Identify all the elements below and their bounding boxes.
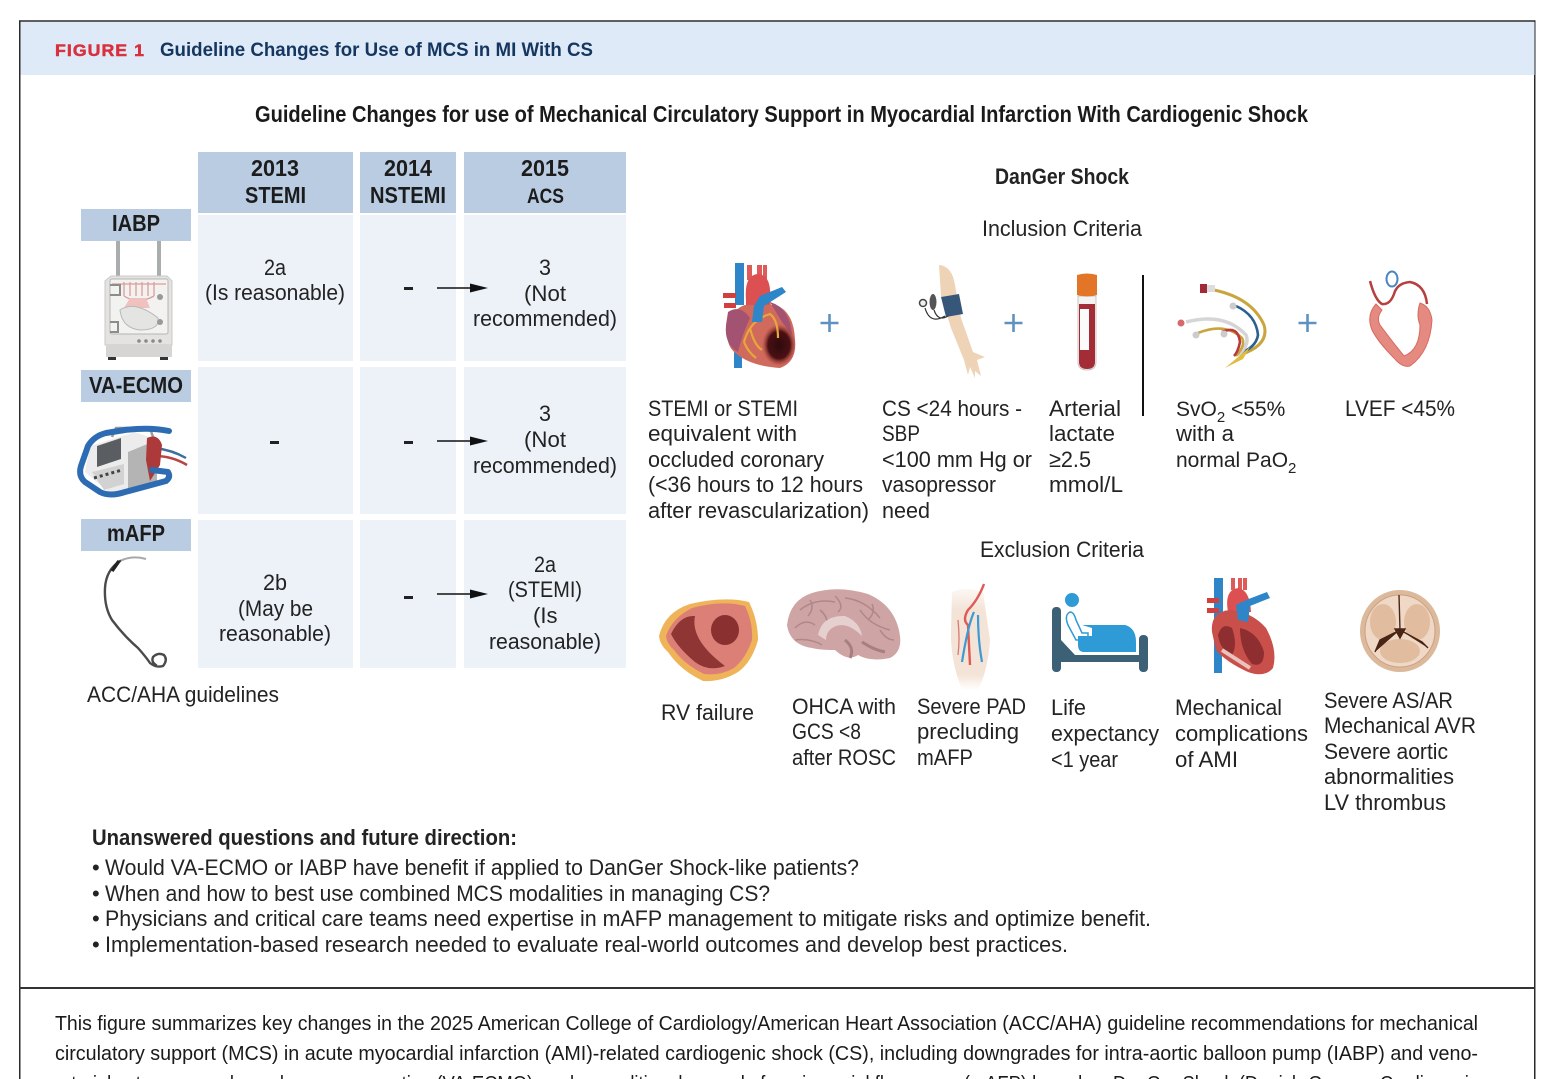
icon: blood tube bbox=[1077, 274, 1097, 370]
text: PAD criterion bbox=[917, 694, 1026, 770]
text: SvO2 criterion: SvO bbox=[1176, 398, 1217, 421]
text: cardiogenic shock criterion: need bbox=[882, 498, 930, 523]
row: IABP cells: 3 bbox=[539, 255, 551, 280]
text: SvO2 criterion: normal PaO bbox=[1176, 449, 1288, 472]
icon: VA-ECMO console bbox=[80, 428, 187, 495]
row: VA-ECMO cells: 3 bbox=[539, 401, 551, 426]
label: IABP bbox=[81, 209, 191, 241]
row: mAFP cells: 2b bbox=[263, 570, 287, 595]
text: aortic criteria: LV thrombus bbox=[1324, 790, 1446, 815]
text: mechanical complications criterion: complications bbox=[1175, 721, 1308, 746]
text: lactate criterion: Arterial bbox=[1049, 396, 1121, 421]
text: lactate criterion: mmol/L bbox=[1049, 472, 1123, 497]
text: STEMI criterion: (<36 hours to 12 hours bbox=[648, 472, 863, 497]
divider: oxygen criteria bbox=[1142, 275, 1144, 416]
text: aortic criteria: Mechanical AVR bbox=[1324, 713, 1476, 738]
header: 2015 ACS: 2015 bbox=[521, 155, 569, 181]
label: mAFP bbox=[81, 519, 191, 551]
figure header band: Guideline Changes for Use of MCS in MI With CS bbox=[160, 40, 593, 61]
header: 2015 ACS: ACS bbox=[527, 185, 564, 208]
panel: unanswered questions: Physicians and critical care teams need expertise in mAFP management to mitigate risks and optimize benefit. bbox=[105, 906, 1151, 931]
text: PAD criterion: Severe PAD bbox=[917, 694, 1026, 719]
panel: unanswered questions: Would VA-ECMO or IABP have benefit if applied to DanGer Shock-like patients? bbox=[105, 855, 859, 880]
text: aortic criteria bbox=[1324, 688, 1476, 815]
header: 2014 NSTEMI: 2014 bbox=[384, 155, 432, 181]
row: mAFP cells: (STEMI) bbox=[508, 577, 582, 602]
row: mAFP cells: reasonable) bbox=[489, 629, 601, 654]
panel: unanswered questions: • bbox=[92, 855, 100, 880]
text: cardiogenic shock criterion: SBP bbox=[882, 421, 920, 446]
text: RV failure: RV failure bbox=[661, 700, 754, 725]
panel: unanswered questions bbox=[92, 825, 1151, 957]
icon: infarcted heart bbox=[723, 263, 796, 368]
text: lactate criterion: lactate bbox=[1049, 421, 1115, 446]
text: cardiogenic shock criterion: <100 mm Hg or bbox=[882, 447, 1032, 472]
text: LVEF criterion: LVEF <45% bbox=[1345, 396, 1455, 421]
figure header band bbox=[20, 22, 1534, 75]
caption: ACC/AHA guidelines: ACC/AHA guidelines bbox=[87, 682, 279, 707]
row: IABP cells bbox=[198, 215, 626, 361]
text: figure caption: This figure summarizes key changes in the 2025 American College of Cardiology/American Heart Association (ACC/AHA) guideline recommendations for mechanical bbox=[55, 1013, 1478, 1035]
heading: inclusion criteria: Inclusion Criteria bbox=[982, 216, 1143, 241]
icon: left ventricle outline bbox=[1370, 272, 1432, 366]
header: 2013 STEMI bbox=[198, 152, 353, 213]
text: SvO2 criterion: 2 bbox=[1217, 409, 1225, 426]
text: aortic criteria: Severe aortic bbox=[1324, 739, 1448, 764]
text: cardiogenic shock criterion: CS <24 hours - bbox=[882, 396, 1022, 421]
icon: mechanical complications heart bbox=[1207, 578, 1274, 674]
row: mAFP cells: (Is bbox=[533, 603, 557, 628]
text: figure caption: circulatory support (MCS) in acute myocardial infarction (AMI)-related cardiogenic shock (CS), including downgrades for intra-aortic balloon pump (IABP) and veno- bbox=[55, 1043, 1478, 1065]
row: VA-ECMO cells: recommended) bbox=[473, 453, 617, 478]
label: VA-ECMO: VA-ECMO bbox=[89, 372, 183, 398]
icon: RV failure heart slice bbox=[659, 599, 758, 681]
icon: leg vessels bbox=[951, 584, 990, 690]
row: VA-ECMO cells bbox=[198, 367, 626, 514]
text: life expectancy criterion: <1 year bbox=[1051, 747, 1118, 772]
text: aortic criteria: Severe AS/AR bbox=[1324, 688, 1453, 713]
icon: aortic valve bbox=[1360, 590, 1440, 672]
icon: brain bbox=[787, 589, 900, 659]
row: IABP cells: (Is reasonable) bbox=[205, 280, 345, 305]
header: 2013 STEMI: 2013 bbox=[251, 155, 299, 181]
text: STEMI criterion: STEMI or STEMI bbox=[648, 396, 798, 421]
icon: microaxial flow pump catheter bbox=[105, 557, 166, 667]
main heading: Guideline Changes for use of Mechanical Circulatory Support in Myocardial Infarction With Cardiogenic Shock bbox=[255, 101, 1308, 127]
label: IABP: IABP bbox=[112, 210, 160, 236]
header: 2013 STEMI: STEMI bbox=[245, 182, 306, 208]
header: 2014 NSTEMI: NSTEMI bbox=[370, 182, 446, 208]
panel: unanswered questions: Implementation-based research needed to evaluate real-world outcomes and develop best practices. bbox=[105, 932, 1068, 957]
plus bbox=[1004, 314, 1022, 332]
text: mechanical complications criterion bbox=[1175, 695, 1308, 772]
figure header band: FIGURE 1 bbox=[55, 41, 145, 60]
text: STEMI criterion: occluded coronary bbox=[648, 447, 824, 472]
row: IABP cells: (Not bbox=[524, 281, 566, 306]
panel: unanswered questions: • bbox=[92, 932, 100, 957]
plus bbox=[1298, 314, 1316, 332]
panel: unanswered questions: • bbox=[92, 881, 100, 906]
plus bbox=[820, 314, 838, 332]
panel: unanswered questions: Unanswered questions and future direction: bbox=[92, 825, 517, 850]
text: SvO2 criterion: with a bbox=[1175, 421, 1235, 446]
header: 2014 NSTEMI bbox=[360, 152, 456, 213]
row: mAFP cells: 2a bbox=[534, 552, 557, 577]
text: SvO2 criterion bbox=[1175, 398, 1296, 477]
text: STEMI criterion: equivalent with bbox=[648, 421, 797, 446]
panel: DanGer Shock bbox=[648, 164, 1476, 815]
text: mechanical complications criterion: Mechanical bbox=[1175, 695, 1282, 720]
text: life expectancy criterion bbox=[1051, 695, 1159, 772]
icon: pulmonary artery catheter bbox=[1178, 284, 1265, 368]
row: mAFP cells: (May be bbox=[238, 596, 313, 621]
text: SvO2 criterion: <55% bbox=[1225, 398, 1285, 421]
heading: DanGer Shock: DanGer Shock bbox=[995, 164, 1130, 189]
text: cardiogenic shock criterion bbox=[882, 396, 1032, 523]
text: figure caption bbox=[55, 1013, 1478, 1079]
text: OHCA criterion: OHCA with bbox=[792, 694, 896, 719]
row: IABP cells: 2a bbox=[264, 255, 287, 280]
icon: patient in bed bbox=[1052, 593, 1148, 672]
row: IABP cells: recommended) bbox=[473, 306, 617, 331]
panel: unanswered questions: When and how to best use combined MCS modalities in managing CS? bbox=[105, 881, 770, 906]
text: lactate criterion: ≥2.5 bbox=[1049, 447, 1091, 472]
text: life expectancy criterion: Life bbox=[1051, 695, 1086, 720]
text: OHCA criterion bbox=[792, 694, 896, 770]
row: mAFP cells bbox=[198, 520, 626, 668]
text: STEMI criterion: after revascularization) bbox=[648, 498, 869, 523]
text: life expectancy criterion: expectancy bbox=[1051, 721, 1159, 746]
text: cardiogenic shock criterion: vasopressor bbox=[882, 472, 996, 497]
row: mAFP cells: reasonable) bbox=[219, 621, 331, 646]
icon: arm with blood pressure cuff bbox=[920, 265, 985, 378]
header: 2015 ACS bbox=[464, 152, 626, 213]
panel: unanswered questions: • bbox=[92, 906, 100, 931]
text: OHCA criterion: after ROSC bbox=[792, 745, 896, 770]
text: STEMI criterion bbox=[648, 396, 869, 523]
text: SvO2 criterion: 2 bbox=[1288, 460, 1296, 477]
heading: exclusion criteria: Exclusion Criteria bbox=[980, 537, 1145, 562]
row: VA-ECMO cells: (Not bbox=[524, 427, 566, 452]
text: PAD criterion: mAFP bbox=[917, 745, 973, 770]
text: PAD criterion: precluding bbox=[917, 719, 1019, 744]
icon: IABP console bbox=[105, 241, 172, 360]
text: mechanical complications criterion: of AMI bbox=[1175, 747, 1238, 772]
text: OHCA criterion: GCS <8 bbox=[792, 719, 861, 744]
label: mAFP: mAFP bbox=[107, 520, 165, 546]
text: aortic criteria: abnormalities bbox=[1324, 764, 1454, 789]
text: lactate criterion bbox=[1049, 396, 1123, 497]
panel: guideline table bbox=[80, 152, 626, 707]
